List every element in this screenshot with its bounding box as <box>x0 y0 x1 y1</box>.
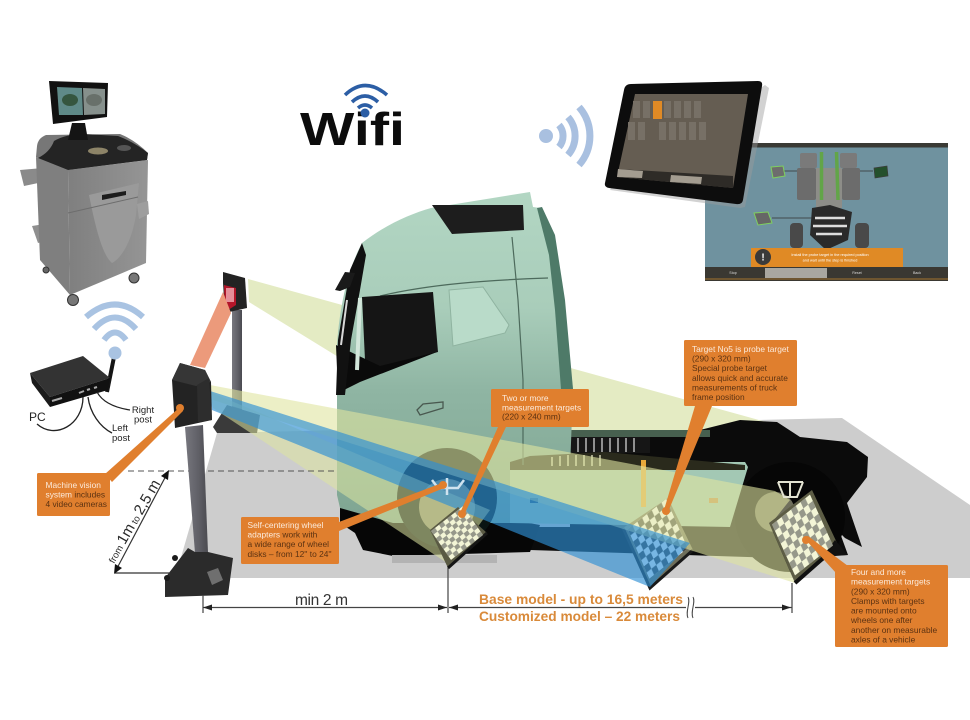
application screen: Install the probe target in the required position <box>791 253 869 257</box>
beam: rear camera to rear target <box>248 279 770 470</box>
application screen <box>705 143 948 281</box>
callout: four and more measurement targets <box>802 536 948 647</box>
callout: machine vision system: system <box>46 490 72 500</box>
callout: two or more measurement targets: (220 x 240 mm) <box>502 412 561 422</box>
front wheel <box>397 448 497 548</box>
callout: four and more measurement targets: Four and more <box>851 567 906 577</box>
dimension: min 2 m <box>203 568 448 613</box>
callout: probe target: Special probe target <box>692 363 768 373</box>
callout: probe target: measurements of truck <box>692 382 778 392</box>
wifi signal: router <box>86 304 143 360</box>
callout: four and more measurement targets: are mounted onto <box>851 606 917 616</box>
callout: machine vision system: includes <box>74 490 105 500</box>
cable label: left post: Left <box>112 423 128 434</box>
cab <box>337 192 573 523</box>
truck <box>335 192 868 572</box>
height reference dashed line <box>128 470 338 472</box>
beam: front camera to front target <box>210 392 490 565</box>
floor <box>175 418 970 578</box>
cable label: right post: post <box>134 414 152 426</box>
callout: four and more measurement targets: measurement targets <box>851 577 930 587</box>
side panel <box>510 462 748 527</box>
tablet <box>605 81 769 208</box>
callout: two or more measurement targets: Two or more <box>502 393 549 403</box>
rear target <box>769 482 848 583</box>
callout: four and more measurement targets: (290 x 320 mm) <box>851 586 910 596</box>
dimension: min 2 m: min 2 m <box>295 592 348 609</box>
router with cables <box>30 352 130 433</box>
application screen: ! <box>761 252 765 264</box>
callout: self-centering wheel adapters: adapters <box>248 530 280 540</box>
front target <box>430 478 487 568</box>
callout: probe target: allows quick and accurate <box>692 373 788 383</box>
cable label: PC: PC <box>29 410 46 424</box>
application screen: Back <box>913 271 921 275</box>
front underbody <box>340 500 540 556</box>
cable label: left post: post <box>112 433 130 444</box>
callout: four and more measurement targets: Clamps with targets <box>851 596 925 606</box>
wifi logo: Wifi <box>300 103 405 155</box>
beam: front camera to probe target <box>210 391 690 587</box>
console cabinet <box>20 81 149 306</box>
base model length: Base model - up to 16,5 meters <box>479 591 683 607</box>
callout: self-centering wheel adapters: Self-centering wheel <box>248 520 324 530</box>
probe target <box>623 498 693 588</box>
application screen: Reset <box>852 271 862 275</box>
rear post <box>213 272 260 433</box>
beam: front camera to rear target <box>210 385 795 583</box>
callout: self-centering wheel adapters: work with <box>282 530 317 540</box>
windows and windscreen <box>362 292 438 367</box>
callout: probe target <box>662 340 797 515</box>
dimension: vehicle length <box>449 583 792 618</box>
callout: probe target: Target No5 is probe target <box>692 344 790 354</box>
wifi signal: tablet <box>539 107 590 165</box>
orange beam between cameras <box>190 292 231 368</box>
front post with camera <box>164 363 233 597</box>
callout: machine vision system: 4 video cameras <box>46 499 107 509</box>
application screen: Stop <box>729 271 737 275</box>
callout: four and more measurement targets: axles of a vehicle <box>851 634 916 644</box>
callout: four and more measurement targets: another on measurable <box>851 625 937 635</box>
callout: two or more measurement targets <box>458 389 589 518</box>
cable label: right post: Right <box>132 405 154 416</box>
callout: probe target: (290 x 320 mm) <box>692 354 751 364</box>
callout: self-centering wheel adapters: disks – from 12'' to 24'' <box>248 549 332 559</box>
door handle <box>417 402 443 415</box>
roof vent <box>432 205 524 234</box>
callout: self-centering wheel adapters <box>241 481 447 564</box>
callout: probe target: frame position <box>692 392 745 402</box>
callout: machine vision system: Machine vision <box>46 480 101 490</box>
callout: four and more measurement targets: wheels one after <box>850 615 913 625</box>
application screen: and wait until the step is finished <box>803 258 857 262</box>
chassis and rear wheels <box>483 420 868 558</box>
callout: two or more measurement targets: measurement targets <box>502 402 581 412</box>
rear cab band <box>537 207 573 389</box>
callout: machine vision system <box>37 404 184 516</box>
dimension: post spacing: from 1m to 2,5 m <box>103 477 164 566</box>
callout: self-centering wheel adapters: a wide range of wheel <box>248 539 329 549</box>
wifi logo <box>300 86 405 155</box>
customized model length: Customized model – 22 meters <box>479 608 680 624</box>
